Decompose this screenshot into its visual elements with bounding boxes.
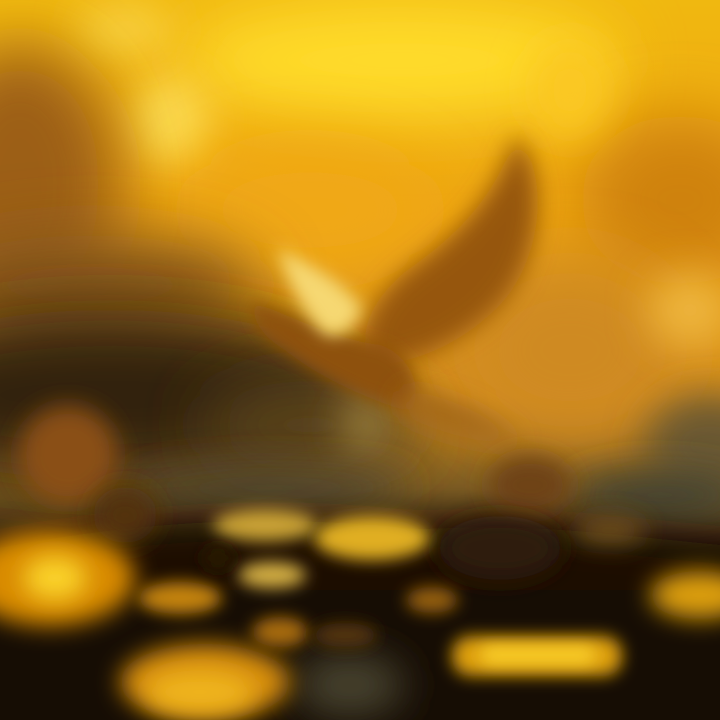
distant dark cloud, right [570, 395, 720, 517]
golden coins [0, 509, 720, 720]
bird light wing [278, 248, 362, 336]
coin: lower right bar [452, 636, 622, 676]
bird body [252, 302, 416, 412]
left rock mound [18, 405, 157, 543]
coin: centre cluster [213, 509, 317, 541]
dark storm cloud, left and middle [0, 45, 420, 506]
coin pile base [0, 455, 720, 720]
bird silhouette [252, 135, 538, 445]
coin: large left [0, 530, 135, 626]
coin: far right [650, 571, 720, 619]
bird tail [398, 390, 520, 445]
coin: bottom left [120, 644, 290, 720]
bird wing [365, 135, 538, 365]
